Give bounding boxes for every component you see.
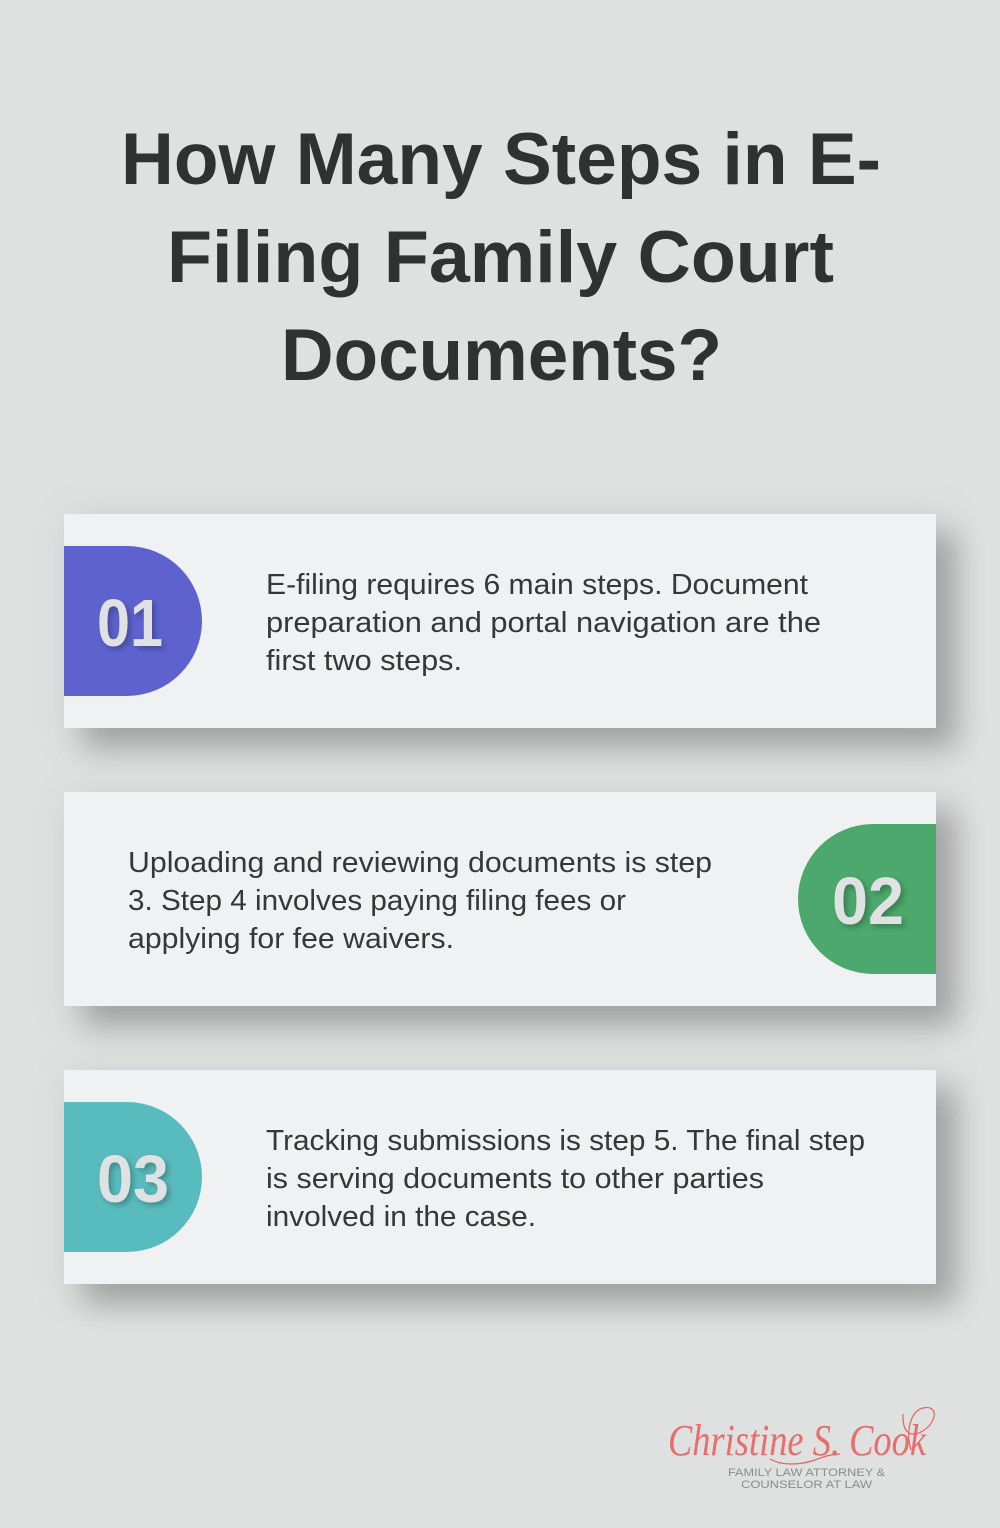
text: step 02 description: 3. Step 4 involves paying filing fees or xyxy=(128,885,626,917)
badge: 01: 01 xyxy=(97,586,163,661)
panel: step 01 xyxy=(58,508,958,748)
logo: Christine S. Cook: FAMILY LAW ATTORNEY & xyxy=(728,1467,886,1479)
text: step 03 description: involved in the case. xyxy=(266,1201,536,1233)
text: step 01 description: first two steps. xyxy=(266,645,462,677)
title: Filing Family Court xyxy=(167,217,834,298)
text: step 02 description: applying for fee waivers. xyxy=(128,923,454,955)
badge: 02: 02 xyxy=(832,864,904,939)
panel: step 02 xyxy=(58,786,958,1026)
text: step 02 description xyxy=(128,847,712,955)
text: step 03 description: is serving documents to other parties xyxy=(266,1163,764,1195)
badge: 03 xyxy=(64,1102,202,1252)
text: step 03 description xyxy=(266,1125,865,1233)
title xyxy=(121,119,881,396)
text: step 01 description: preparation and portal navigation are the xyxy=(266,607,821,639)
badge: 01 xyxy=(64,546,202,696)
text: step 01 description: E-filing requires 6 main steps. Document xyxy=(266,569,808,601)
logo: Christine S. Cook: Christine S. Cook xyxy=(668,1416,927,1465)
logo: Christine S. Cook xyxy=(668,1408,934,1491)
logo: Christine S. Cook: COUNSELOR AT LAW xyxy=(741,1479,873,1491)
text: step 01 description xyxy=(266,569,821,677)
badge: 02 xyxy=(798,824,936,974)
title: How Many Steps in E- xyxy=(121,119,881,200)
text: step 03 description: Tracking submissions is step 5. The final step xyxy=(266,1125,865,1157)
title: Documents? xyxy=(281,315,722,396)
badge: 03: 03 xyxy=(97,1142,169,1217)
text: step 02 description: Uploading and reviewing documents is step xyxy=(128,847,712,879)
panel: step 03 xyxy=(58,1064,958,1304)
